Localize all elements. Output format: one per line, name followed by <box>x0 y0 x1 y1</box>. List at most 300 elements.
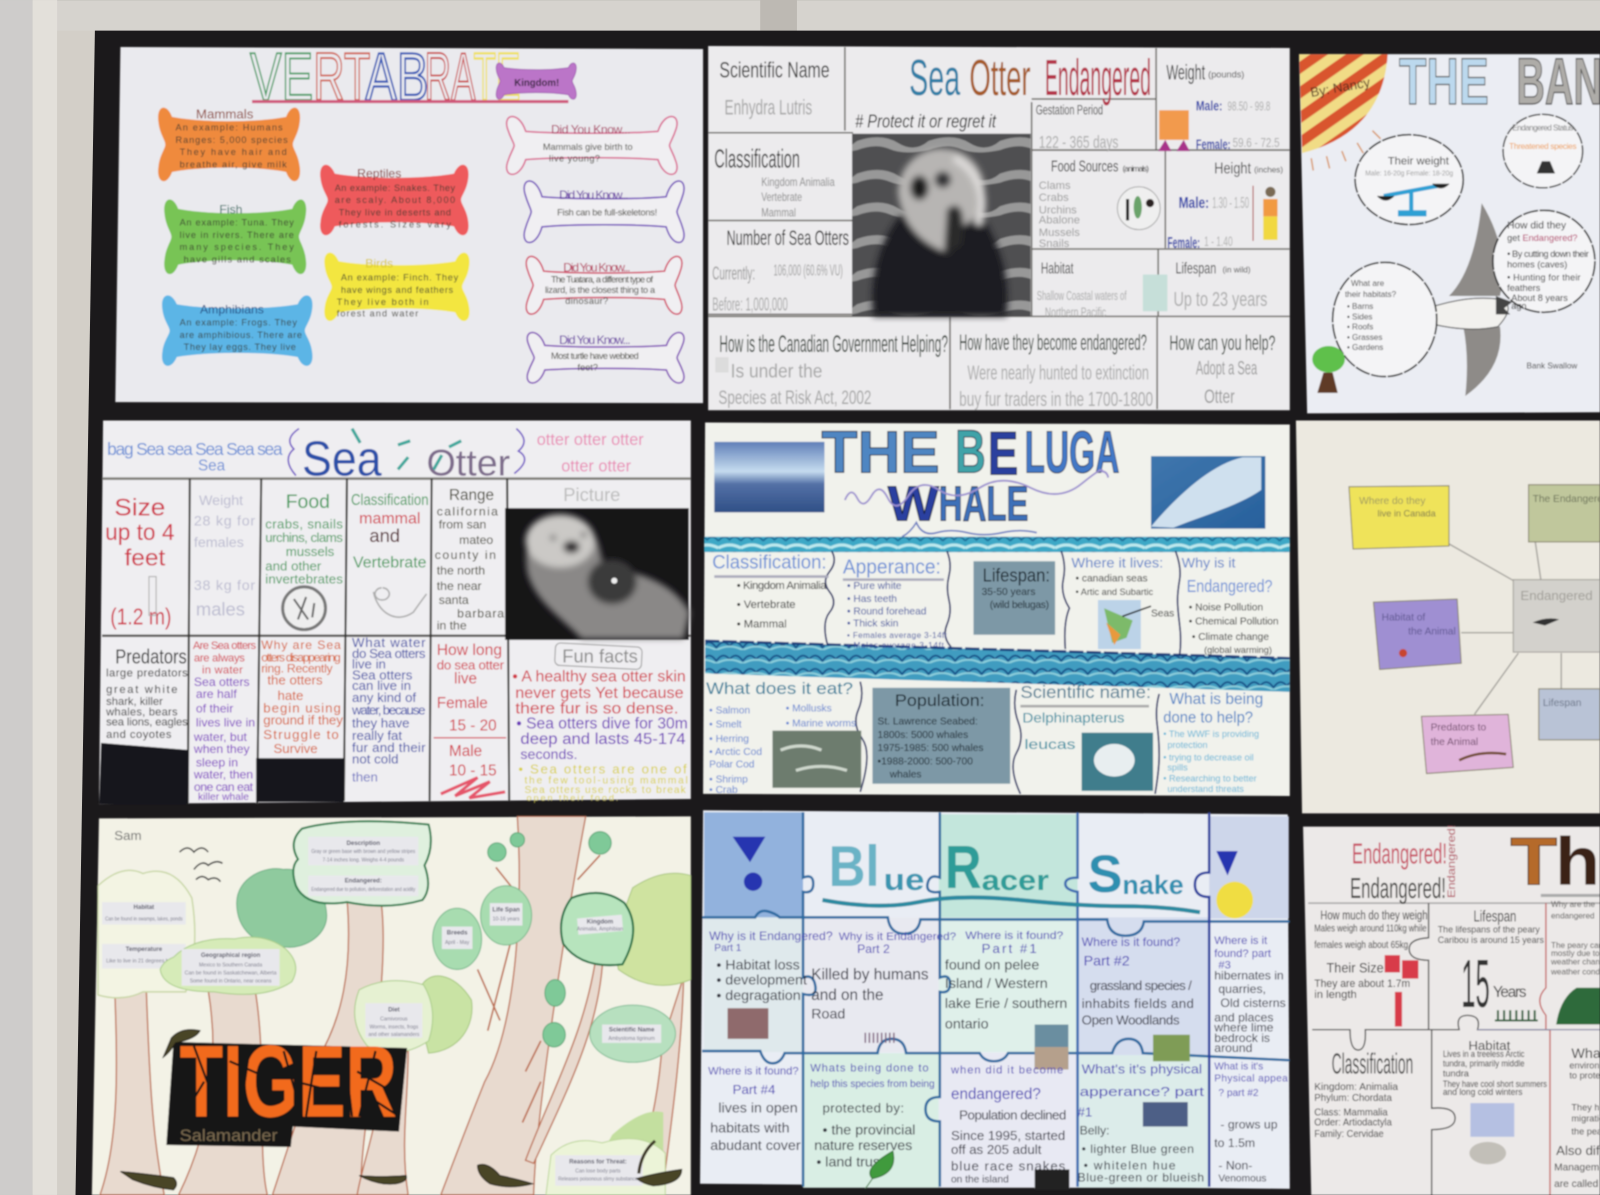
bone outline: Did You Know fish: Fish can be full-skeletons! <box>557 207 657 217</box>
block: food sources <box>1039 158 1160 250</box>
connector lines <box>1449 510 1561 714</box>
cell: range: from san <box>439 518 487 532</box>
canopy: scientific name: Scientific Name <box>609 1027 655 1034</box>
black block: why disappearing <box>256 758 344 802</box>
bone outline: Did You Know tuatara: Did You Know... <box>563 260 631 274</box>
block: what is being done: understand threats <box>1167 784 1244 794</box>
cell: how long: Female <box>437 695 488 712</box>
block: how can you help: Adopt a Sea <box>1196 358 1257 380</box>
cell: endangered part 2: and on the <box>811 987 884 1004</box>
block: why endangered <box>1182 555 1279 655</box>
cell: classification: Vertebrate <box>353 554 427 571</box>
block: what does it eat <box>706 680 861 796</box>
branches <box>478 855 600 1122</box>
cell: why disappearing: Survive <box>273 741 318 756</box>
cell: are sea otters always in water: Sea otters <box>194 675 250 689</box>
block: number of sea otters: 106,000 (60.6% VU) <box>773 263 843 280</box>
panel: The Peary Caribou poster: Classification <box>1332 1049 1413 1081</box>
block: height <box>1167 161 1283 252</box>
block: height: Female: <box>1167 235 1200 252</box>
block: food sources: Crabs <box>1039 192 1069 204</box>
bone: Fish: An example: Tuna. They <box>180 218 294 228</box>
bone: Birds: An example: Finch. They <box>341 273 459 283</box>
canopy: habitat and temperature: Habitat <box>134 904 154 911</box>
bone: Birds: Birds <box>365 256 393 270</box>
cell: where found part 2: Part #2 <box>1084 953 1130 969</box>
block: how endangered: How have they become endangered? <box>959 330 1147 355</box>
icon: kingdom bone <box>496 63 576 99</box>
box: yellow: live in Canada <box>1378 508 1437 518</box>
cell: range: barbara <box>457 606 504 620</box>
cell: lifespan: 15 <box>1461 947 1490 1022</box>
panel: Sea Otter Endangered poster: How is the Canadian Government Helping? <box>719 331 948 358</box>
box: population: Population: <box>895 692 985 710</box>
bone: Fish: many species. They <box>180 242 294 252</box>
heading: Blue Racer Snake: Bl <box>829 835 880 899</box>
block: weight: (pounds) <box>1208 70 1244 80</box>
cell: food: urchins, clams <box>265 530 343 545</box>
cell: why disappearing: ground if they <box>263 713 343 728</box>
block: weight: Male: <box>1196 98 1222 114</box>
cell: what is being done <box>810 1062 935 1189</box>
cell: where found part 4: Where is it found? <box>708 1066 799 1078</box>
box: lifespan: 35-50 years <box>982 587 1035 598</box>
panel: mind map poster <box>1296 420 1600 813</box>
heading: The: h <box>1555 825 1600 900</box>
cell: classification <box>351 492 429 617</box>
block: what does it eat: • Marine worms <box>786 719 856 730</box>
cell: size: up to 4 <box>105 519 174 545</box>
cell: classification: and <box>369 525 400 546</box>
heading: Sea Otter: Otter <box>427 443 510 484</box>
box: pink: the Animal <box>1431 737 1478 748</box>
block: height: (inches) <box>1254 165 1283 174</box>
block: where it lives: Seas <box>1151 608 1174 619</box>
block: classification: Vertebrate <box>761 190 802 204</box>
cell: classification: Classification <box>351 492 429 509</box>
bone outline: Did You Know mammals: Mammals give birth to <box>543 142 633 152</box>
heading: THE BAN: THE <box>1399 45 1489 119</box>
cell: physical appearance part 1: #1 <box>1078 1104 1092 1119</box>
cell: are sea otters always in water: water, then <box>193 768 253 782</box>
cell: physical appearance part 1: • whitelen hue <box>1084 1158 1176 1172</box>
canopy: description and endangered <box>293 821 431 906</box>
block: how endangered <box>959 330 1153 411</box>
table grid <box>102 479 691 804</box>
block: food sources: Mussels <box>1039 227 1080 239</box>
cell: endangered part 1: • degragation <box>716 988 801 1004</box>
heading: The Beluga Whale: LUGA <box>1024 419 1119 486</box>
block: classification: Classification <box>714 145 800 173</box>
canopy: habitat and temperature: Can be found in swamps, lakes, ponds <box>105 916 183 922</box>
icon: birds <box>180 848 222 882</box>
bone: Amphibians <box>162 295 313 366</box>
heading: Blue Racer Snake: S <box>1088 845 1122 904</box>
bone: Mammals: Mammals <box>196 106 254 121</box>
heading: The Beluga Whale: B <box>955 418 986 486</box>
heading: The Beluga Whale: HALE <box>939 477 1029 531</box>
small leaves <box>488 832 611 1047</box>
cell: where found part 4: Part #4 <box>733 1082 775 1097</box>
icon: tree <box>1312 346 1345 393</box>
cell: are sea otters always in water: water, but <box>193 730 248 744</box>
block: appearance: • Males average 3-14ft <box>847 641 945 650</box>
bone: Mammals: An example: Humans <box>176 123 283 133</box>
cloud: how endangered: get Endangered? <box>1507 233 1578 243</box>
cell: why disappearing: otters disappearing <box>261 650 341 664</box>
heading: Sea Otter: Sea <box>198 457 226 474</box>
bone outline: Did You Know turtles <box>527 332 684 383</box>
cloud: habitats: • Roofs <box>1347 323 1373 332</box>
cell: where found part 1: found on pelee <box>945 957 1039 973</box>
canopy: diet: Worms, insects, frogs <box>369 1025 419 1031</box>
panel: The Bank Swallow poster <box>1299 45 1600 413</box>
heading: Blue Racer Snake: nake <box>1122 870 1184 900</box>
cell: food: and other <box>265 558 322 573</box>
cell: fun facts: deep and lasts 45-174 <box>520 731 686 748</box>
block: what does it eat: • Mollusks <box>786 703 832 714</box>
bone: Fish: have gills and scales <box>184 254 291 264</box>
panel: The Peary Caribou poster <box>1303 825 1600 1195</box>
cloud: weight <box>1355 135 1463 225</box>
photo: ocean <box>714 442 824 512</box>
canopy: habitat and temperature: Like to live in 21 degrees habitat <box>106 958 182 964</box>
block: food sources: Urchins <box>1039 204 1077 216</box>
bone: Mammals: breathe air, give milk <box>180 159 287 169</box>
heading: Blue Racer Snake <box>822 833 1200 912</box>
heading: Sea Otter: bag Sea sea Sea Sea sea <box>107 439 283 459</box>
cell: where found part 2: Where is it found? <box>1082 935 1180 949</box>
canopy: breeds <box>433 908 482 969</box>
block: why endangered: Endangered? <box>1187 576 1272 596</box>
cell: weight: 38 kg for <box>194 578 255 594</box>
bone outline: Did You Know fish <box>524 181 684 243</box>
bone: Mammals: Ranges: 5,000 species <box>176 135 288 145</box>
cell: weight: Weight <box>199 493 243 509</box>
cell: classification <box>1314 1049 1413 1140</box>
cell: physical appearance part 2: Physical appea <box>1214 1074 1288 1085</box>
block: lifespan: Lifespan <box>1176 261 1216 278</box>
block: Canadian government: Is under the <box>731 361 822 383</box>
block: number of sea otters: Currently: <box>712 263 755 284</box>
cell: how long: live <box>454 671 477 688</box>
cell: where found part 3: Where is it <box>1214 935 1268 947</box>
cell: what water: live in <box>352 656 386 671</box>
cell: where found part 1: Island / Western <box>945 976 1048 992</box>
block: what does it eat: • Salmon <box>709 705 750 716</box>
block: why endangered: Why is it <box>1182 555 1236 571</box>
cell: weight <box>194 493 255 619</box>
photo: sea otter <box>852 134 1031 316</box>
cell: what water <box>351 635 426 785</box>
bone: Fish: live in rivers. There are <box>180 230 294 240</box>
box: population: whales <box>889 770 922 781</box>
cell: why disappearing: hate <box>278 688 303 703</box>
canopy: solid green <box>237 869 327 947</box>
cell: habitat: Lives in a treeless Arctic <box>1443 1049 1525 1059</box>
cell: where found part 2: inhabits fields and <box>1082 996 1194 1011</box>
cell: are sea otters always in water: when they <box>193 742 251 756</box>
cell: size: Size <box>114 494 165 521</box>
panel: Beluga whale poster <box>703 418 1290 796</box>
block: food sources: Clams <box>1039 180 1071 192</box>
cell: weight and size: Their Size <box>1327 960 1384 976</box>
bone outline: Did You Know mammals <box>507 117 677 174</box>
cloud: habitats: • Gardens <box>1347 343 1383 352</box>
cell: physical appearance part 2: - grows up <box>1220 1118 1278 1132</box>
cloud: how endangered: ago <box>1511 301 1527 311</box>
canopy: scientific name: Ambystoma tigrinum <box>608 1036 655 1042</box>
cell: classification: Family: Cervidae <box>1314 1129 1384 1140</box>
block: height: 1.30 - 1.50 <box>1212 195 1249 212</box>
cell: predators: shark, killer <box>106 696 163 708</box>
canopy: reasons for threat <box>546 1111 665 1195</box>
cell: habitat: and long cold winters <box>1443 1087 1523 1097</box>
cell: weight and size: They are about 1.7m <box>1314 978 1410 990</box>
block: scientific name: leucas <box>1024 737 1076 753</box>
bone: Birds: have wings and feathers <box>341 285 453 295</box>
heading: Blue Racer Snake: R <box>945 833 982 901</box>
block: appearance: • Females average 3-14ft <box>847 631 948 640</box>
cell: habitat <box>1443 1038 1547 1164</box>
cell: are sea otters always in water: Are Sea otters <box>193 640 257 652</box>
cell: what is being done: • land trusts <box>816 1154 891 1170</box>
text: author: Sam <box>114 828 142 843</box>
heading: Endangered: Endangered! <box>1352 838 1447 870</box>
block: what does it eat: Polar Cod <box>709 759 755 770</box>
cell: when endangered: when did it become <box>950 1065 1063 1077</box>
block: how can you help: Otter <box>1204 386 1235 408</box>
block: height: Male: <box>1179 195 1209 212</box>
cell: habitat: tundra, primarily middle <box>1443 1058 1524 1068</box>
block: number of sea otters <box>712 226 849 314</box>
trees trunks <box>100 816 684 1195</box>
cloud: weight: Male: 16-20g Female: 18-20g <box>1365 170 1453 178</box>
block: lifespan: (in wild) <box>1222 266 1251 275</box>
block: habitat: Habitat <box>1041 261 1074 278</box>
cell: where found part 4: abudant cover <box>710 1138 801 1154</box>
cell: why disappearing: Why are Sea <box>261 638 341 652</box>
cell: physical appearance part 1: • lighter Blue green <box>1082 1142 1194 1156</box>
icon: kingdom bone: Kingdom! <box>514 78 559 89</box>
cell: what: to prote <box>1569 1071 1600 1081</box>
cell: what water: then <box>352 770 378 785</box>
cell: food: invertebrates <box>265 572 343 587</box>
canopy: kingdom <box>561 893 633 965</box>
heading: Endangered: Endangered! <box>1446 825 1458 898</box>
sign: Tiger <box>166 1024 407 1147</box>
bone outline: Did You Know fish: Did You Know... <box>559 188 629 202</box>
block: what does it eat: • Smelt <box>709 720 742 731</box>
bone: Reptiles: They live in deserts and <box>339 207 451 217</box>
cell: fun facts: open their food. <box>527 793 618 803</box>
heading: THE BAN <box>1399 45 1600 119</box>
cell: lifespan: Lifespan <box>1473 908 1516 925</box>
block: classification: Classification: <box>712 551 827 573</box>
cell: predators: large predators <box>106 668 188 680</box>
heading: The Beluga Whale <box>821 418 1119 531</box>
block: appearance: • Has teeth <box>847 594 897 605</box>
cell: physical appearance part 2: What is it's <box>1214 1061 1263 1072</box>
cell: physical appearance part 2: - Non- <box>1218 1158 1252 1172</box>
cell: range: the north <box>437 564 485 578</box>
cell: are sea otters always in water: killer whale <box>198 792 249 803</box>
cell: where found part 3: Old cisterns <box>1220 996 1286 1010</box>
cell: endangered part 1 <box>709 929 833 1039</box>
bone: Birds: They live both in <box>337 297 429 307</box>
cell: predators: Predators <box>115 646 187 668</box>
cell: endangered part 1: Why is it Endangered? <box>709 929 833 943</box>
heading: Endangered: Endangered! <box>1350 873 1446 905</box>
cell: are sea otters always in water <box>193 640 257 803</box>
canopy: description and endangered: Gray or green base with brown and yellow stripes <box>311 849 416 855</box>
canopy: reasons for threat: Releases poisonous slimy substance <box>558 1177 638 1183</box>
block: number of sea otters: Before: 1,000,000 <box>712 293 788 314</box>
bone outline: Did You Know turtles: Did You Know... <box>559 333 631 347</box>
block: what does it eat: • Arctic Cod <box>709 747 762 758</box>
box: purple: the Animal <box>1408 627 1456 638</box>
cell: why disappearing: the otters <box>267 673 323 688</box>
cell: what water: do Sea otters <box>352 646 426 661</box>
cell: what water: What water <box>352 635 426 650</box>
cell: what is being done: protected by: <box>822 1100 904 1115</box>
box: blue-grey: Lifespan <box>1543 698 1581 709</box>
box: lifespan: (wild belugas) <box>990 600 1049 611</box>
cell: range: county in <box>435 548 496 562</box>
black block: predators <box>99 743 189 804</box>
cell: food <box>265 491 343 630</box>
cell: why endangered: endangered <box>1551 911 1595 920</box>
box: pink: Predators to <box>1431 723 1486 734</box>
block: lifespan: Up to 23 years <box>1173 289 1267 311</box>
cell: where found part 3: and places <box>1214 1010 1273 1024</box>
canopy: description and endangered: 7-14 inches long. Weighs 4-4 pounds <box>322 857 405 863</box>
canopy: life span: 10-16 years <box>493 916 520 922</box>
cell: fun facts: • Sea otters dive for 30m <box>516 716 688 733</box>
cell: what water: not cold <box>352 751 398 766</box>
cloud: how endangered: feathers <box>1507 283 1541 293</box>
block: habitat: Shallow Coastal waters of <box>1037 288 1127 303</box>
box: purple: Habitat of <box>1382 612 1425 623</box>
heading: VERTABRATE: AB <box>365 40 429 115</box>
cell: physical appearance part 2: ? part #2 <box>1218 1088 1259 1099</box>
cell: physical appearance part 1: Belly: <box>1080 1124 1110 1138</box>
cell: why endangered: Why are the <box>1551 900 1595 909</box>
bone: Mammals <box>158 106 300 181</box>
block: gestation: Gestation Period <box>1036 102 1103 118</box>
cell: what is being done: • the provincial <box>822 1123 915 1139</box>
bone: Birds: forest and water <box>337 308 418 318</box>
cell: food: mussels <box>286 544 335 559</box>
block: scientific name <box>1020 682 1153 791</box>
cloud: endangered <box>1503 114 1583 188</box>
block: weight <box>1158 61 1280 153</box>
panel: Vertebrate kingdom poster <box>115 40 703 403</box>
bone outline: Did You Know tuatara <box>526 256 682 314</box>
heading: The: T <box>1510 825 1557 900</box>
wave band: upper <box>704 537 1290 552</box>
block: gestation: 122 - 365 days <box>1039 132 1119 152</box>
cell: when endangered <box>950 1065 1069 1190</box>
canopy: pale right <box>617 873 691 985</box>
block: where it lives: • canadian seas <box>1076 574 1148 585</box>
canopy: description and endangered: Endangered due to pollution, deforestation and acidity <box>311 887 416 893</box>
cell: lifespan: The lifespans of the peary <box>1438 925 1540 935</box>
bone: Amphibians: They lay eggs. They live <box>184 342 296 352</box>
cell: endangered part 2: Part 2 <box>857 942 890 956</box>
icon: scale <box>1158 110 1190 151</box>
cell: where found part 1 <box>945 930 1068 1069</box>
block: why endangered: • Chemical Pollution <box>1189 617 1279 628</box>
heading: VERTABRATE: VE <box>250 40 313 115</box>
block: scientific name: Delphinapterus <box>1022 710 1124 726</box>
cell: predators: great white <box>106 684 178 696</box>
heading: Sea Otter <box>107 429 644 487</box>
icon: exclamation right with smiley <box>1216 851 1253 918</box>
box: population: 1975-1985: 500 whales <box>878 743 983 754</box>
heading: VERTABRATE: RA <box>424 40 476 115</box>
canopy: diet: Carnivorous <box>380 1016 408 1022</box>
cell: what water: fur and their <box>352 740 426 755</box>
cell: fun facts: Sea otters use rocks to break <box>524 785 687 796</box>
cell: weight and size: Males weigh around 110kg while <box>1314 924 1427 935</box>
block: why endangered: (global warming) <box>1204 645 1272 655</box>
sign: Tiger: Salamander <box>180 1127 278 1145</box>
bone: Fish <box>164 199 306 274</box>
cell: weight: 28 kg for <box>194 514 255 530</box>
cell: are sea otters always in water: of their <box>196 701 233 715</box>
cell: what water: Sea otters <box>352 668 413 683</box>
box: yellow <box>1349 486 1449 549</box>
cell: classification: Class: Mammalia <box>1314 1107 1388 1118</box>
bone outline: Did You Know tuatara: lizard, is the closest thing to a <box>545 285 656 295</box>
shaded puzzle tiles <box>704 812 1289 1188</box>
cell: lifespan <box>1438 908 1544 1022</box>
cell: fun facts: seconds. <box>520 747 578 763</box>
block: what is being done: What is being <box>1169 691 1263 708</box>
cell: food: Food <box>286 491 330 513</box>
cell: why disappearing <box>261 638 343 756</box>
cell: endangered part 1: Part 1 <box>714 943 742 954</box>
cell: predators <box>105 646 188 741</box>
cell: size <box>105 494 174 630</box>
cell: predators: and coyotes <box>106 729 172 741</box>
bone outline: Did You Know tuatara: dinosaur? <box>565 296 608 306</box>
bone: Reptiles: Reptiles <box>357 167 401 181</box>
cell: fun facts: Fun facts <box>562 645 638 666</box>
block: gestation <box>1036 102 1119 152</box>
block: appearance <box>843 557 948 650</box>
cell: physical appearance part 1: What's it's physical <box>1082 1062 1202 1077</box>
wavy dividers <box>825 551 1181 794</box>
heading: VERTABRATE: RT <box>313 40 370 115</box>
block: weight: 59.6 - 72.5 <box>1233 135 1280 150</box>
block: Canadian government: Species at Risk Act, 2002 <box>718 387 871 409</box>
cell: where found part 3: found? part <box>1214 948 1272 960</box>
block: food sources: (animals) <box>1122 164 1149 173</box>
bone: Amphibians: Amphibians <box>200 302 264 316</box>
cell: how long <box>434 642 506 798</box>
canopy: life span <box>481 886 532 945</box>
canopy: geographical region: Can be found in Saskatchewan, Alberta <box>185 971 277 977</box>
cell: where found part 2 <box>1082 935 1194 1061</box>
cell: where found part 3: where lime <box>1213 1021 1274 1035</box>
block: where it lives: Where it lives: <box>1071 555 1163 571</box>
cell: weight and size: How much do they weigh <box>1320 907 1428 922</box>
cell: are sea otters always in water: are always <box>194 652 245 664</box>
cell: what: are called <box>1554 1179 1599 1190</box>
cell: when endangered: on the island <box>951 1175 1009 1186</box>
